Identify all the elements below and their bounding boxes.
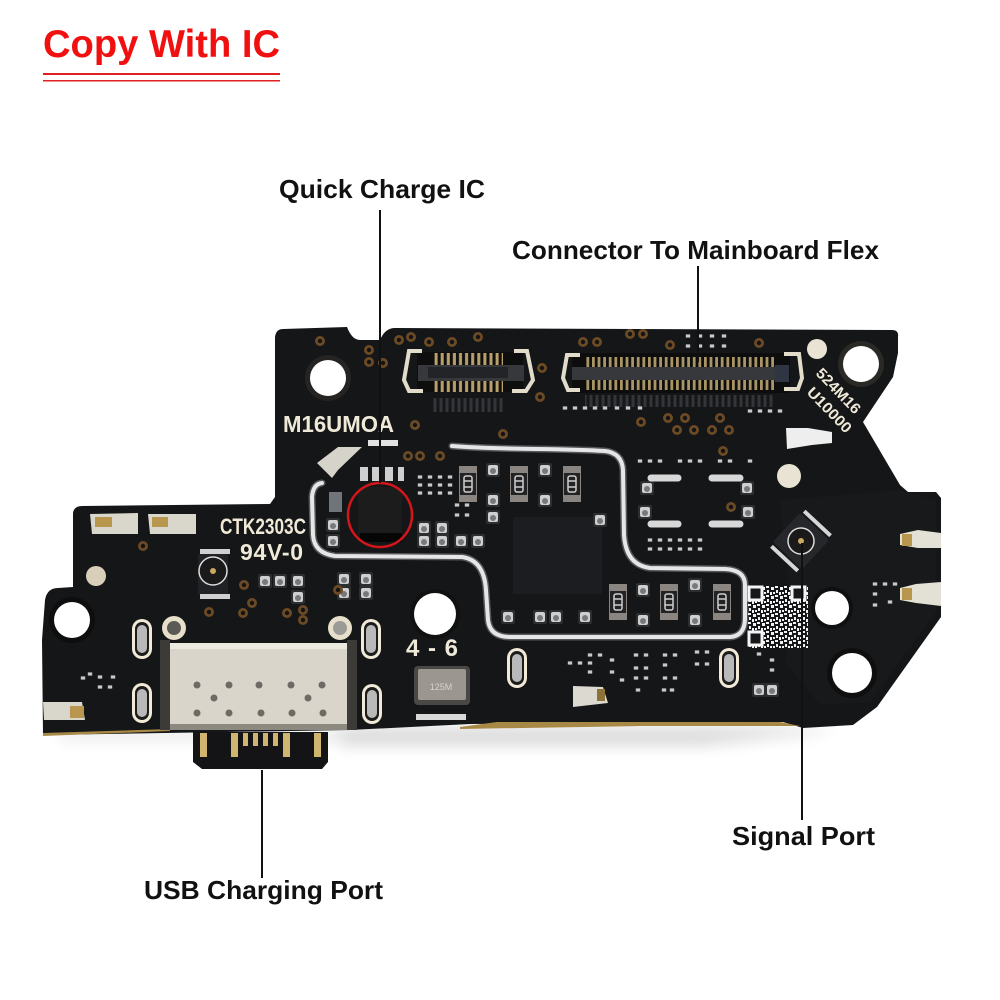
mounting holes	[49, 341, 884, 698]
main board connector	[563, 353, 802, 407]
silkscreen 94V-0: 94V-0	[240, 539, 303, 565]
QR code	[748, 586, 808, 648]
label: Signal Port: Signal Port	[732, 821, 875, 851]
quick charge IC chip	[358, 487, 402, 542]
circuit board	[42, 327, 941, 769]
silkscreen U10000: U10000	[803, 384, 855, 437]
board shadow	[60, 728, 840, 745]
RF connector left	[198, 549, 230, 599]
silkscreen CTK2303C: CTK2303C	[220, 514, 306, 539]
gold board edge	[43, 722, 800, 736]
main processor chip	[513, 517, 602, 594]
label: Connector To Mainboard Flex: Connector To Mainboard Flex	[512, 235, 880, 265]
leader line: USB	[261, 770, 263, 878]
trace highlight	[312, 446, 745, 637]
leader line: Connector	[697, 266, 699, 362]
shield clips	[43, 339, 941, 720]
solder shield trace	[312, 446, 745, 637]
silkscreen 4-6: 4-6	[406, 635, 458, 662]
leader line: Quick Charge IC	[379, 210, 381, 483]
RF signal connector	[769, 508, 833, 574]
leader line: Signal Port	[801, 543, 803, 820]
ground tone patch	[780, 490, 936, 705]
silkscreen 524M16: 524M16	[812, 365, 864, 418]
pads and resistors	[81, 329, 897, 697]
small connector	[404, 351, 533, 412]
label: Quick Charge IC: Quick Charge IC	[279, 174, 485, 204]
oval solder slots	[132, 616, 739, 724]
label: USB Charging Port: USB Charging Port	[144, 875, 383, 905]
USB-C port	[160, 640, 357, 769]
callout circle	[348, 483, 412, 547]
crystal: 125M	[430, 682, 452, 692]
board outline	[42, 327, 941, 735]
crystal	[414, 666, 470, 720]
silkscreen M16UMOA: M16UMOA	[283, 411, 394, 437]
title: Copy With IC	[43, 23, 280, 66]
